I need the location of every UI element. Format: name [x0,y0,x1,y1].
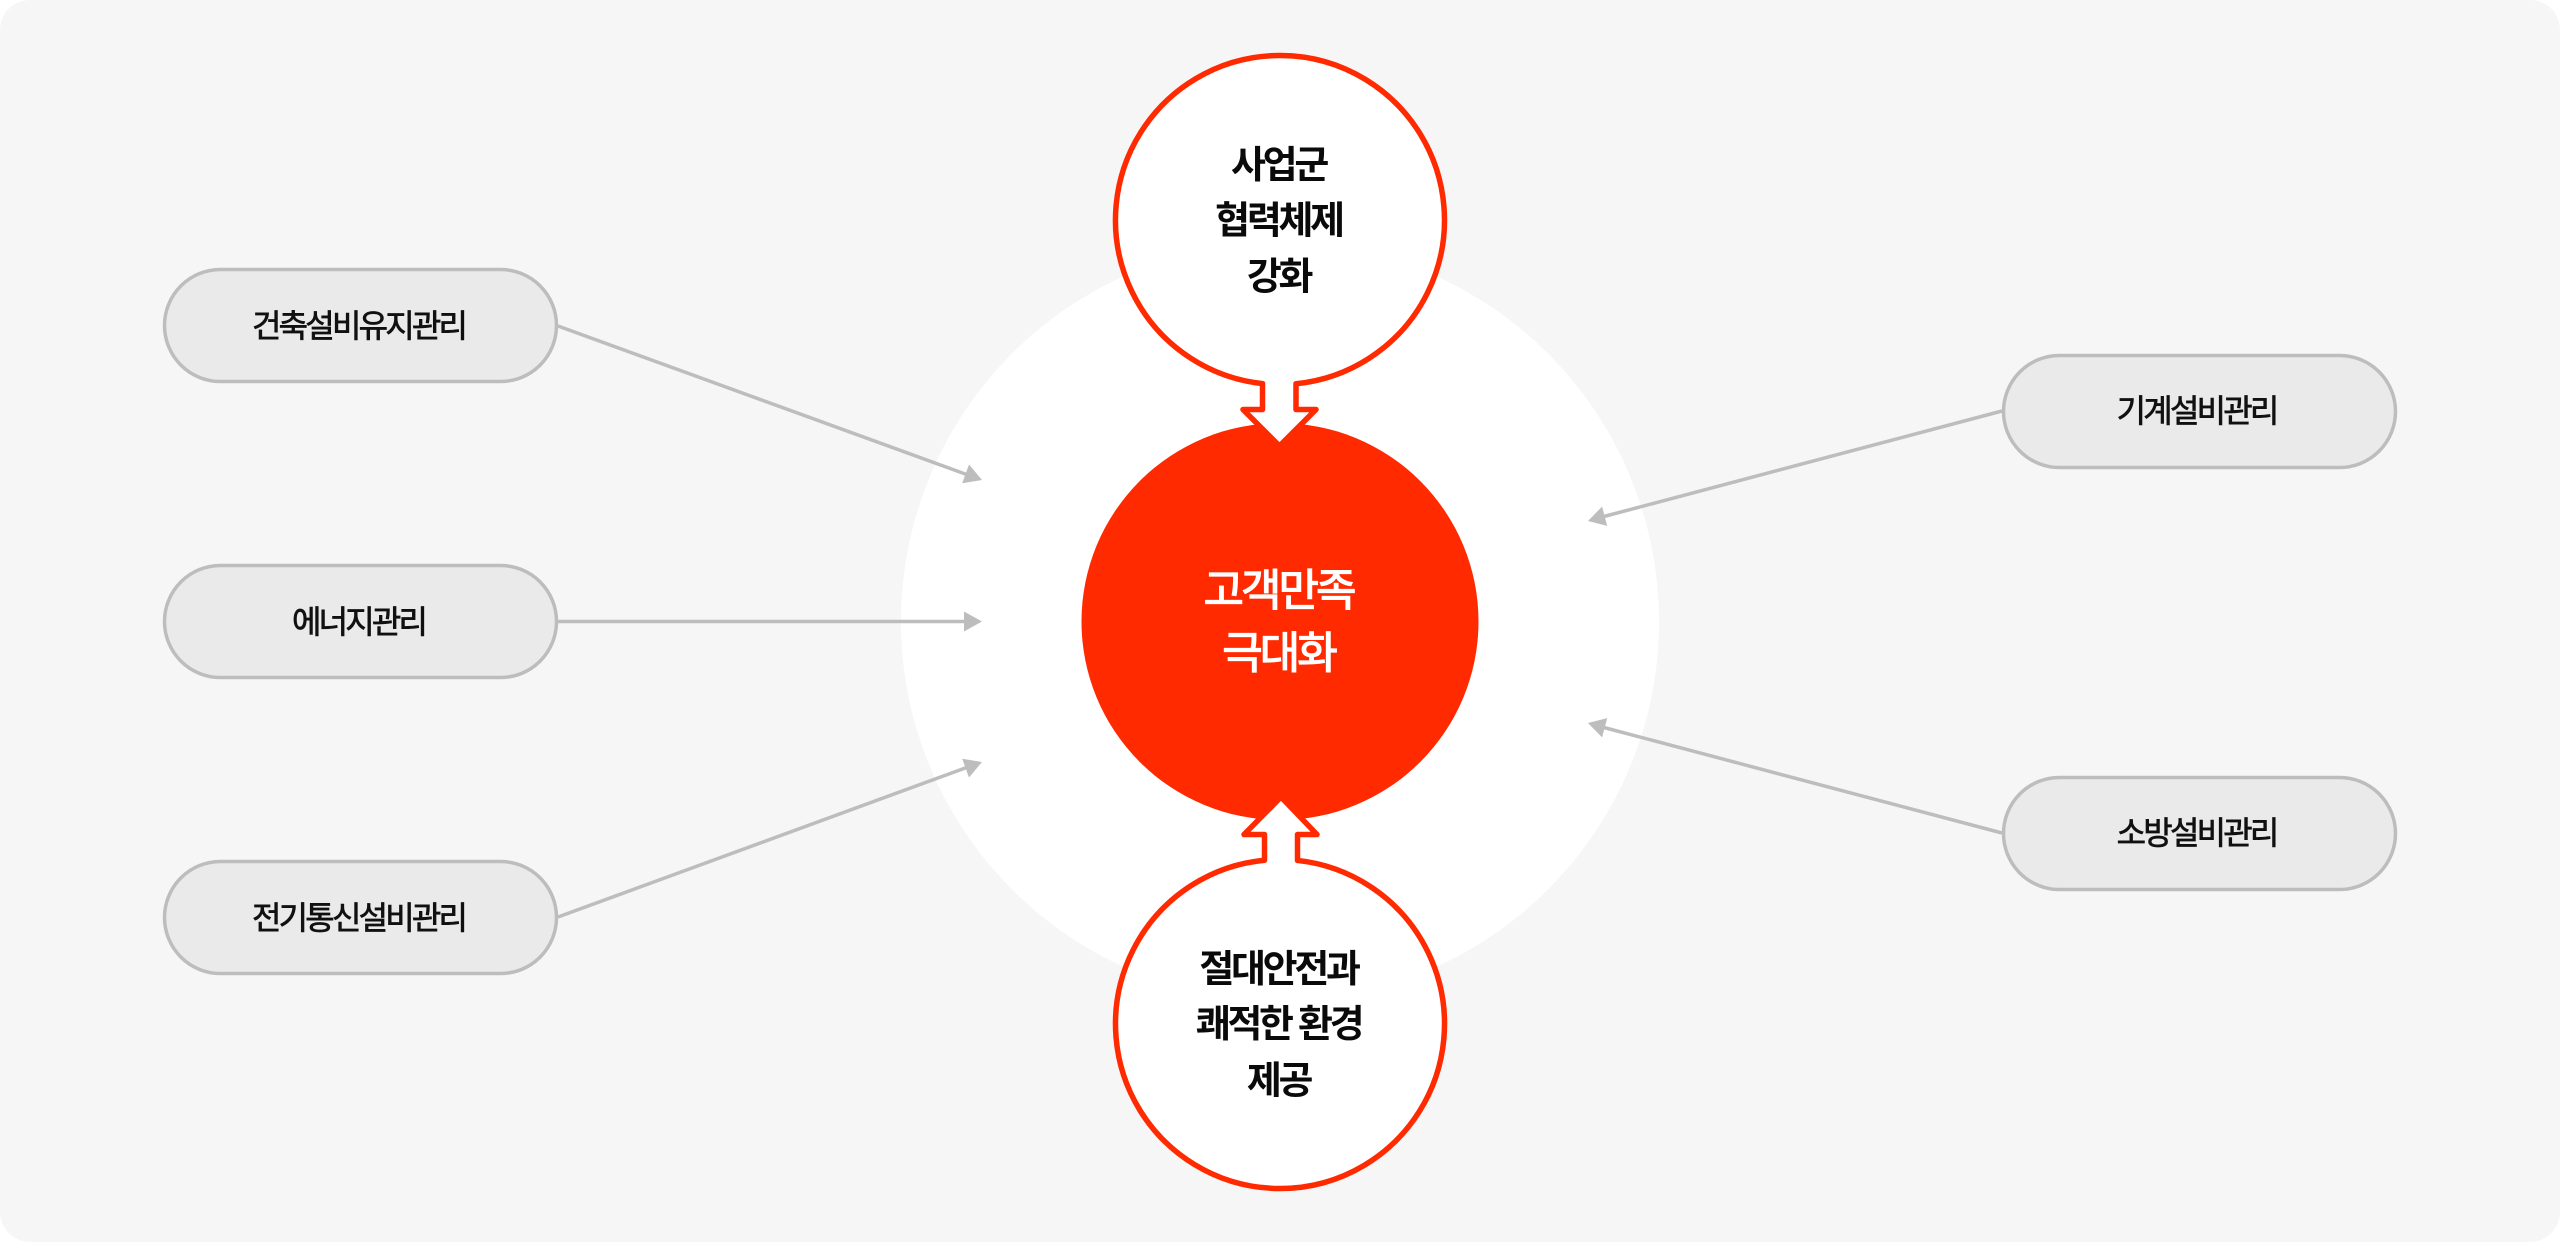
central text: 극대화 [1222,629,1337,678]
pill: 에너지관리: 에너지관리 [292,604,425,640]
pill: 기계설비관리 [2004,356,2396,468]
top circle with down arrow [1115,56,1444,446]
top circle text: 협력체제 [1215,200,1342,242]
pill: 전기통신설비관리: 전기통신설비관리 [252,900,465,936]
pill: 건축설비유지관리: 건축설비유지관리 [252,308,465,344]
pill: 건축설비유지관리 [164,270,556,382]
arrow: top right [1588,411,2002,526]
pill: 소방설비관리 [2004,778,2396,890]
central red circle [1082,423,1478,820]
central text: 고객만족 [1204,566,1355,616]
pill: 에너지관리 [164,566,556,678]
arrow: middle left [558,612,982,632]
bottom circle text: 절대안전과 [1199,949,1360,991]
large white circle [901,242,1659,1000]
arrow: bottom right [1588,718,2002,833]
pill: 전기통신설비관리 [164,862,556,974]
pill: 기계설비관리: 기계설비관리 [2117,393,2277,429]
arrow: top left [558,326,982,483]
bottom circle text: 쾌적한 환경 [1196,1004,1362,1046]
top circle text: 강화 [1247,256,1312,298]
bottom circle with up arrow [1116,797,1445,1188]
top circle text: 사업군 [1231,145,1328,187]
arrow: bottom left [558,759,982,917]
bottom circle text: 제공 [1247,1060,1312,1102]
pill: 소방설비관리: 소방설비관리 [2117,815,2277,851]
